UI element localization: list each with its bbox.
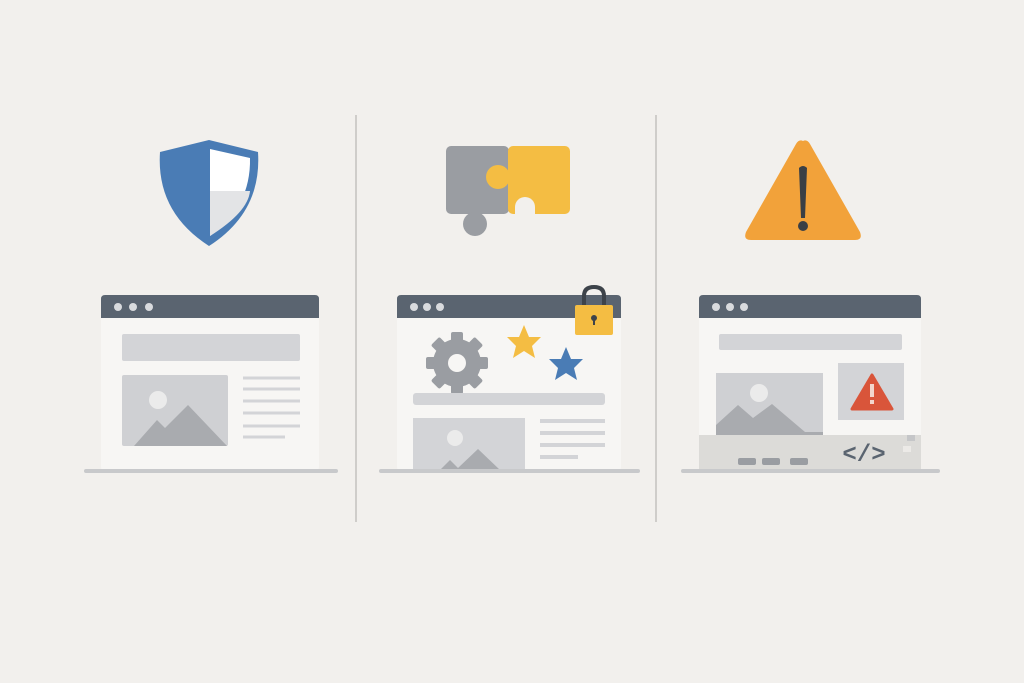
code bar: </>: [842, 442, 886, 469]
icon: puzzle: [446, 146, 570, 236]
code bar: [699, 435, 921, 469]
browser window: plain: [84, 295, 338, 473]
icon: gear: [426, 332, 488, 394]
browser window: errors: [681, 295, 940, 473]
icon: padlock: [575, 287, 613, 335]
panel: security: [84, 140, 338, 473]
error box: [838, 363, 904, 420]
browser window: extensions: [379, 287, 640, 473]
panel: warnings: [681, 140, 940, 473]
icon: warning triangle: [745, 140, 861, 240]
panel: plugins: [379, 146, 640, 473]
icon: shield: [160, 140, 258, 246]
icon: blue star: [549, 347, 583, 380]
icon: yellow star: [507, 325, 541, 358]
